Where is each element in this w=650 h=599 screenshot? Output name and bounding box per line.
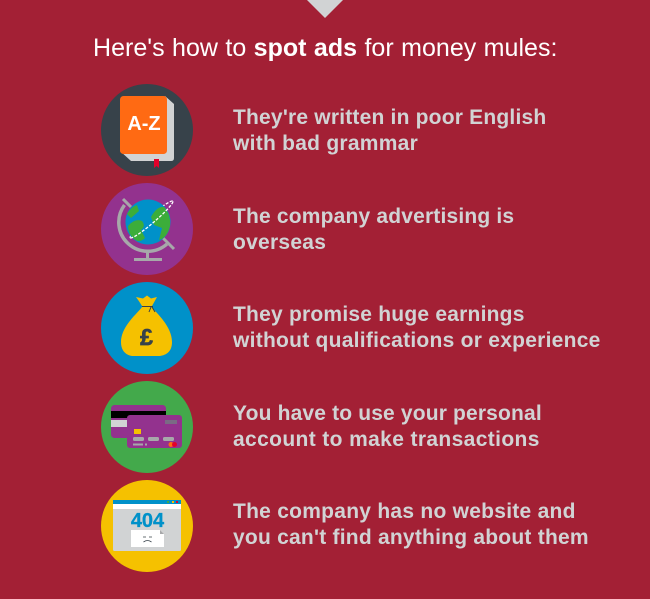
text: personal account	[233, 402, 542, 451]
text: personal account: account to make transactions	[233, 428, 540, 451]
arrow: pointer at top	[307, 0, 343, 18]
text: huge earnings	[233, 303, 601, 352]
text: company overseas: overseas	[233, 231, 326, 254]
text: company overseas	[233, 205, 514, 254]
text: poor English: with bad grammar	[233, 132, 418, 155]
text: poor English	[233, 106, 546, 155]
title: Here's how to spot ads for money mules:	[93, 34, 557, 62]
icon: bank cards	[101, 381, 193, 473]
text: huge earnings: They promise huge earnings	[233, 303, 525, 326]
icon: 404 browser page	[101, 480, 193, 572]
icon: A-Z dictionary: A-Z	[127, 113, 161, 135]
text: personal account: You have to use your personal	[233, 402, 542, 425]
text: poor English: They're written in poor English	[233, 106, 546, 129]
text: huge earnings: without qualifications or experience	[233, 329, 601, 352]
text: no website: you can't find anything about them	[233, 526, 589, 549]
icon: globe	[101, 183, 193, 275]
text: no website	[233, 500, 589, 549]
text: company overseas: The company advertising is	[233, 205, 514, 228]
text: no website: The company has no website and	[233, 500, 576, 523]
icon: A-Z dictionary	[101, 84, 193, 176]
icon: money bag: £	[140, 324, 153, 350]
icon: 404 browser page: 404	[131, 510, 165, 532]
icon: money bag	[101, 282, 193, 374]
